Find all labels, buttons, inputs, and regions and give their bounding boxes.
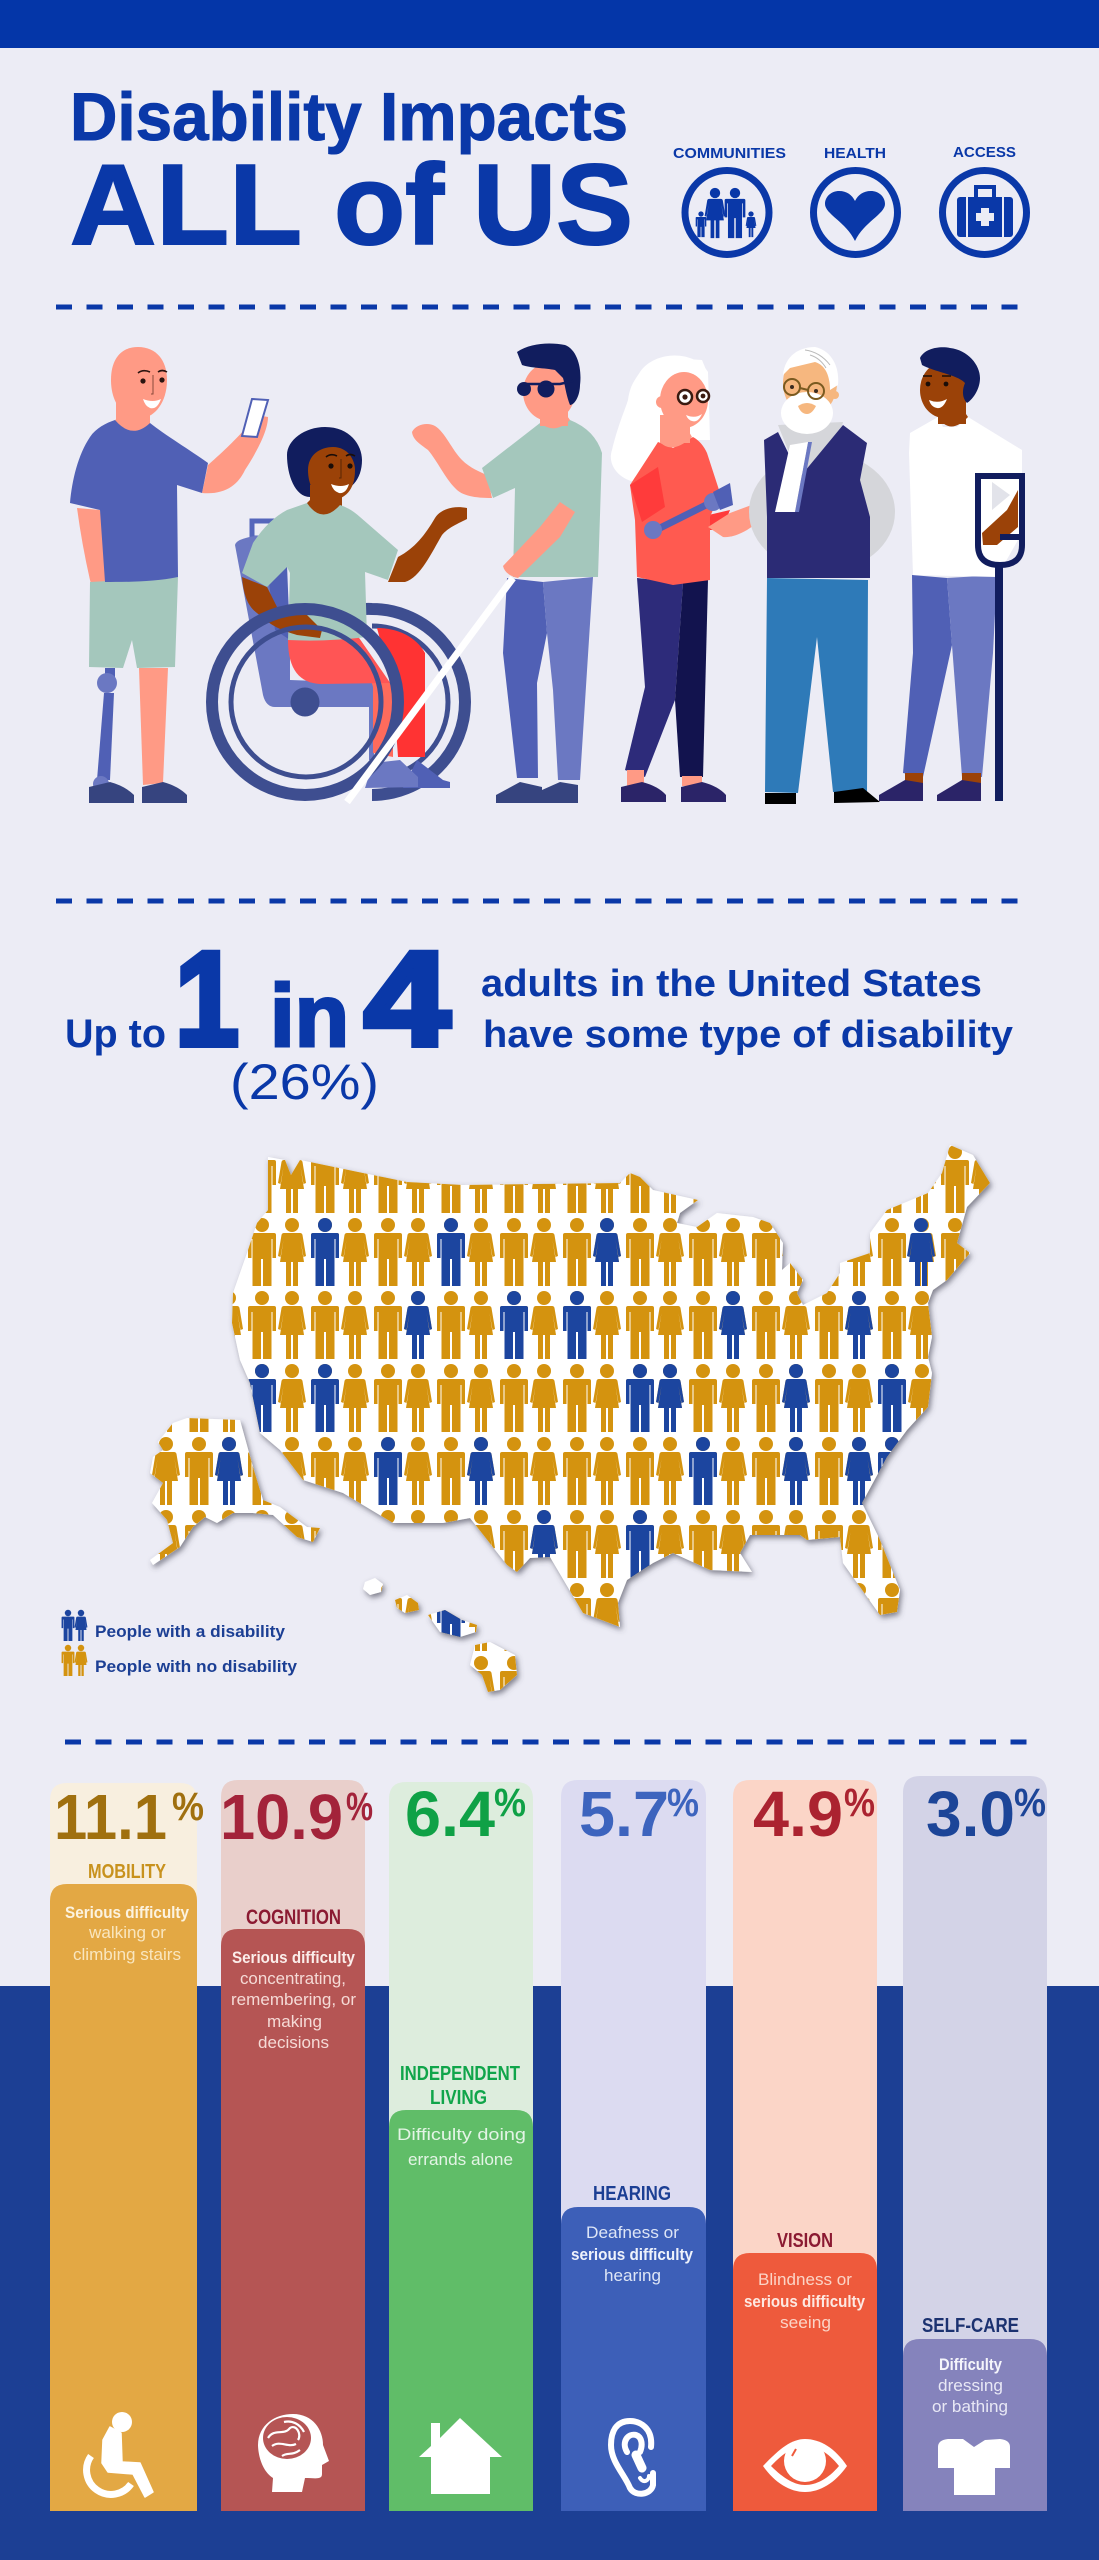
description: serious difficulty <box>571 2245 693 2264</box>
icon row: communities, health, access <box>673 144 1026 254</box>
label <box>400 2063 520 2109</box>
label: MOBILITY <box>88 1861 167 1883</box>
description: or bathing <box>932 2397 1008 2416</box>
description: Difficulty <box>939 2355 1002 2374</box>
icon: shirt <box>938 2439 1010 2495</box>
icon: head with brain <box>258 2414 329 2492</box>
legend: people with no disability: People with no disability <box>95 1657 298 1676</box>
title: of <box>334 142 445 269</box>
description: Serious difficulty <box>65 1903 189 1922</box>
description: hearing <box>604 2266 661 2285</box>
legend: people with a disability <box>62 1610 286 1641</box>
description line 2: have some type of disability <box>483 1014 1013 1056</box>
description: Blindness or <box>758 2270 852 2289</box>
person: older man with beard and paper <box>749 347 895 804</box>
map: United States filled with people icons <box>149 1145 994 1698</box>
description: decisions <box>258 2033 329 2052</box>
white cane <box>347 578 513 802</box>
label: SELF-CARE <box>922 2315 1019 2337</box>
icon: ear <box>611 2421 653 2494</box>
value: 3.0 <box>926 1778 1015 1850</box>
big 1: 1 <box>175 925 239 1074</box>
percent: % <box>172 1785 204 1829</box>
description <box>397 2125 526 2169</box>
up to: Up to <box>65 1012 166 1056</box>
label: VISION <box>777 2230 833 2252</box>
icon: wheelchair user <box>87 2412 153 2497</box>
description: dressing <box>938 2376 1003 2395</box>
percent: % <box>346 1785 373 1829</box>
description <box>932 2355 1008 2416</box>
icon: family in circle <box>685 170 769 254</box>
bottom blue band <box>0 1986 1099 2560</box>
label: INDEPENDENT <box>400 2063 520 2085</box>
icon label: communities: COMMUNITIES <box>673 145 786 162</box>
panel: hearing <box>561 1778 706 2511</box>
description: walking or <box>88 1923 166 1942</box>
panel: independent living <box>389 1778 533 2511</box>
dashed divider <box>56 304 1022 310</box>
legend: people with no disability <box>62 1645 298 1676</box>
description: remembering, or <box>231 1990 356 2009</box>
value: 5.7 <box>579 1778 669 1850</box>
icon label: health: HEALTH <box>824 145 886 162</box>
panel: self-care <box>903 1776 1047 2511</box>
value: 4.9 <box>753 1778 843 1850</box>
description: Difficulty doing <box>397 2125 526 2144</box>
in: in <box>270 966 349 1065</box>
description <box>744 2270 865 2332</box>
person: woman in wheelchair <box>212 427 467 795</box>
person: blind man with cane <box>347 343 602 803</box>
title <box>70 79 633 269</box>
description <box>65 1903 189 1964</box>
percent: % <box>494 1781 526 1825</box>
illustration: group of people with disabilities <box>70 343 1022 804</box>
icon: eye <box>763 2439 847 2492</box>
percent: % <box>1014 1781 1046 1825</box>
panel: mobility <box>50 1781 204 2511</box>
statistic: up to 1 in 4 <box>65 925 1013 1110</box>
person: man with prosthetic leg and phone <box>70 347 268 803</box>
person: man with crutch <box>879 347 1022 801</box>
title: Disability Impacts <box>70 79 628 155</box>
dashed divider <box>65 1740 1030 1744</box>
icon: heart in circle <box>814 170 898 254</box>
description: climbing stairs <box>73 1945 181 1964</box>
person: older woman with prosthetic arm <box>611 356 777 802</box>
description <box>571 2223 693 2285</box>
label: COGNITION <box>246 1906 341 1929</box>
title: ALL <box>70 142 302 269</box>
description: serious difficulty <box>744 2292 865 2311</box>
icon: medical bag in circle <box>942 170 1026 254</box>
description: concentrating, <box>240 1969 346 1988</box>
description <box>231 1948 356 2052</box>
description: making <box>267 2012 322 2031</box>
label: LIVING <box>430 2087 487 2109</box>
description: Serious difficulty <box>232 1948 355 1967</box>
legend: people with a disability: People with a disability <box>95 1622 286 1641</box>
description: adults in the United States <box>481 963 982 1005</box>
panel: vision <box>733 1778 877 2511</box>
26 percent: (26%) <box>230 1054 379 1110</box>
percent: % <box>667 1781 699 1825</box>
big 4: 4 <box>364 925 450 1074</box>
label: HEARING <box>593 2183 671 2205</box>
panel: cognition <box>220 1780 373 2511</box>
value: 11.1 <box>54 1781 167 1853</box>
legend <box>62 1610 298 1676</box>
description: Deafness or <box>586 2223 679 2242</box>
value: 10.9 <box>220 1781 343 1853</box>
description: seeing <box>780 2313 831 2332</box>
icon label: access: ACCESS <box>953 144 1016 161</box>
top banner <box>0 0 1099 48</box>
percent: % <box>844 1781 875 1825</box>
icon: house <box>419 2418 502 2494</box>
dashed divider <box>56 898 1022 904</box>
title: US <box>473 142 633 269</box>
description: errands alone <box>408 2150 513 2169</box>
value: 6.4 <box>405 1778 495 1850</box>
